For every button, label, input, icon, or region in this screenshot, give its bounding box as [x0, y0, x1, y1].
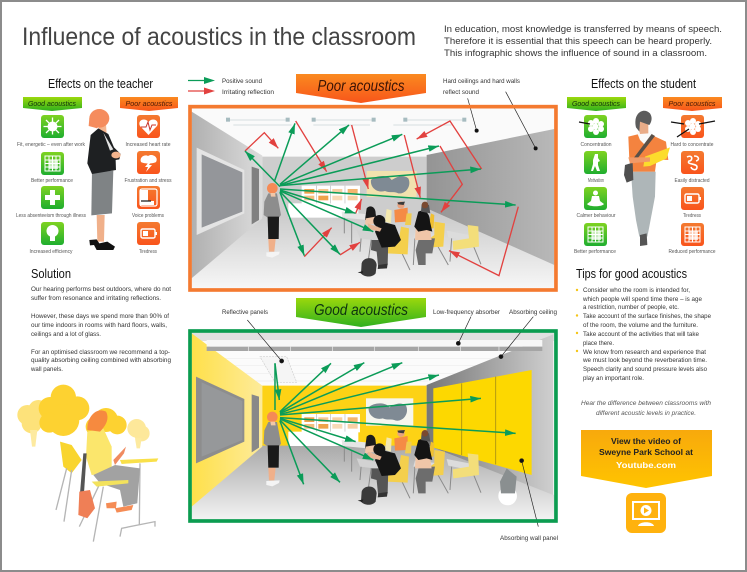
tips text: Take account of the surface finishes, the shape — [583, 313, 711, 320]
callout labels: good room: Absorbing ceiling — [509, 310, 557, 316]
students and desks — [342, 430, 481, 505]
icon: bulb — [41, 222, 64, 245]
banner: poor acoustics — [296, 74, 426, 103]
tips text: play an important role. — [583, 375, 644, 382]
body text: For an optimised classroom we recommend a top- — [31, 349, 170, 356]
icon: battery — [681, 187, 704, 210]
tips text: We know from research and experience that — [583, 349, 706, 356]
icon: voice — [137, 186, 160, 209]
icon: distracted — [681, 151, 704, 174]
callout leaders — [247, 317, 538, 527]
note: hard ceilings: Hard ceilings and hard walls — [443, 79, 520, 85]
tips text: of the room, the volume and the furniture. — [583, 322, 698, 329]
panel: good acoustics classroom — [190, 317, 556, 527]
title: Influence of acoustics in the classroom — [22, 23, 416, 51]
legend: positive sound: Positive sound — [222, 79, 262, 85]
label: Concentration — [580, 142, 612, 148]
intro text: This infographic shows the influence of sound in a classroom. — [444, 48, 707, 59]
body text: suffer from resonance and irritating reflections. — [31, 295, 161, 302]
icon: concentration — [579, 115, 607, 138]
icon: heart — [137, 115, 160, 138]
illustration: student — [624, 111, 670, 246]
callout labels: good room: Reflective panels — [222, 310, 268, 316]
intro text: In education, most knowledge is transferred by means of speech. — [444, 24, 722, 35]
map — [367, 171, 417, 197]
banner: good acoustics — [296, 298, 426, 327]
icon: battery — [137, 222, 160, 245]
icon: calmer — [584, 187, 607, 210]
green sound rays — [275, 363, 516, 484]
label: Tiredness — [683, 213, 701, 219]
label: Better performance — [31, 178, 73, 184]
banner: poor acoustics: Poor acoustics — [318, 78, 404, 95]
body text: Our hearing performs best outdoors, where do not — [31, 286, 171, 293]
label: Easily distracted — [674, 178, 710, 184]
plant — [498, 468, 517, 505]
illustration: teacher — [87, 109, 121, 250]
label: Calmer behaviour — [576, 213, 616, 219]
banner: good acoustics: Good acoustics — [314, 302, 408, 319]
tag: poor acoustics: Poor acoustics — [126, 99, 173, 108]
icon: motivation — [584, 151, 607, 174]
green sound rays — [245, 123, 516, 256]
students and desks — [342, 201, 481, 276]
intro text: Therefore it is essential that this speech can be heard properly. — [444, 36, 712, 47]
label: Fit, energetic – even after work — [17, 142, 85, 148]
label: Hard to concentrate — [670, 142, 714, 148]
red reflections — [245, 121, 518, 276]
tag: poor acoustics — [120, 97, 178, 111]
italic note — [581, 400, 711, 417]
label: Reduced performance — [668, 249, 716, 255]
callout: youtube banner — [581, 430, 712, 488]
tips text: we must look beyond the reverberation time. — [582, 357, 707, 364]
icon: video play — [626, 493, 666, 533]
legend: irritating reflection: Irritating reflection — [222, 90, 274, 96]
icon: grid — [584, 223, 607, 246]
intro text — [444, 24, 722, 59]
panel: solution — [17, 267, 171, 542]
label: Motivation — [588, 178, 604, 184]
tips text: a restriction, number of people, etc. — [583, 304, 679, 311]
tag: good acoustics: Good acoustics — [572, 99, 620, 108]
heading: Effects on the teacher — [48, 77, 153, 91]
tips text: Take account of the activities that will take — [583, 331, 699, 338]
reflective panel — [260, 357, 297, 382]
map — [366, 398, 413, 426]
callout labels: good room — [222, 310, 558, 542]
callout: hard ceiling — [468, 92, 538, 150]
tag: poor acoustics: Poor acoustics — [668, 99, 716, 108]
tag: good acoustics — [23, 97, 82, 111]
body text: wall panels. — [30, 366, 63, 373]
label: Frustration and stress — [124, 178, 172, 184]
panel: effects on the student — [567, 77, 722, 255]
panel: tips for good acoustics — [576, 267, 712, 533]
body text: our time indoors in rooms with hard floors, walls, — [31, 322, 167, 329]
illustration: student under trees — [17, 385, 158, 542]
cabinet — [288, 186, 360, 218]
note: hard ceilings: reflect sound — [443, 90, 479, 96]
label: Better performance — [574, 249, 616, 255]
tag: good acoustics: Good acoustics — [28, 99, 76, 108]
legend — [188, 77, 274, 96]
tips text: Speech clarity and sound pressure levels also — [583, 366, 707, 373]
tips text: place there. — [583, 340, 614, 347]
cabinet — [288, 414, 360, 446]
body text: However, these days we spend more than 90% of — [31, 313, 169, 320]
tips text: which people will spend time there – is age — [582, 296, 702, 303]
icon: reduced performance — [681, 223, 704, 246]
tag: poor acoustics — [663, 97, 722, 111]
label: Tiredness — [139, 249, 157, 255]
green frame — [190, 331, 556, 521]
label: Increased heart rate — [126, 142, 171, 148]
icon: grid — [41, 152, 64, 175]
low-frequency absorber — [207, 340, 542, 351]
heading: Effects on the student — [591, 77, 696, 91]
teacher — [264, 183, 281, 258]
italic note: different acoustic levels in practice. — [596, 410, 696, 417]
teacher — [264, 412, 281, 486]
heading: Tips for good acoustics — [576, 267, 687, 281]
icon: hard to concentrate — [671, 115, 715, 138]
icon: storm — [137, 151, 160, 174]
label: Less absenteeism through illness — [16, 213, 86, 219]
callout labels: good room: Absorbing wall panel — [500, 536, 558, 542]
icon: sun — [41, 115, 64, 138]
body text — [30, 286, 171, 373]
body text: ceilings and a lot of glass. — [31, 331, 101, 338]
panel: effects on the teacher — [16, 77, 178, 255]
tips text: Consider who the room is intended for, — [583, 287, 690, 294]
tag: good acoustics — [567, 97, 626, 111]
orange frame — [190, 107, 556, 290]
body text: quality absorbing ceiling combined with absorbing — [31, 357, 171, 364]
icon: plus — [41, 186, 64, 209]
label: Increased efficiency — [30, 249, 73, 255]
callout labels: good room: Low-frequency absorber — [433, 310, 500, 316]
italic note: Hear the difference between classrooms with — [581, 400, 711, 407]
bullets — [576, 289, 578, 352]
panel: poor acoustics classroom — [190, 92, 556, 290]
label: Voice problems — [132, 213, 164, 219]
note: hard ceilings — [443, 79, 520, 96]
ceiling tiles — [208, 358, 532, 381]
callout: youtube banner: Youtube.com — [616, 460, 676, 470]
heading: Solution — [31, 267, 71, 281]
callout: youtube banner: View the video of — [611, 437, 681, 446]
callout: youtube banner: Sweyne Park School at — [599, 448, 693, 457]
tips text — [582, 287, 711, 382]
ceiling lights — [228, 120, 465, 125]
